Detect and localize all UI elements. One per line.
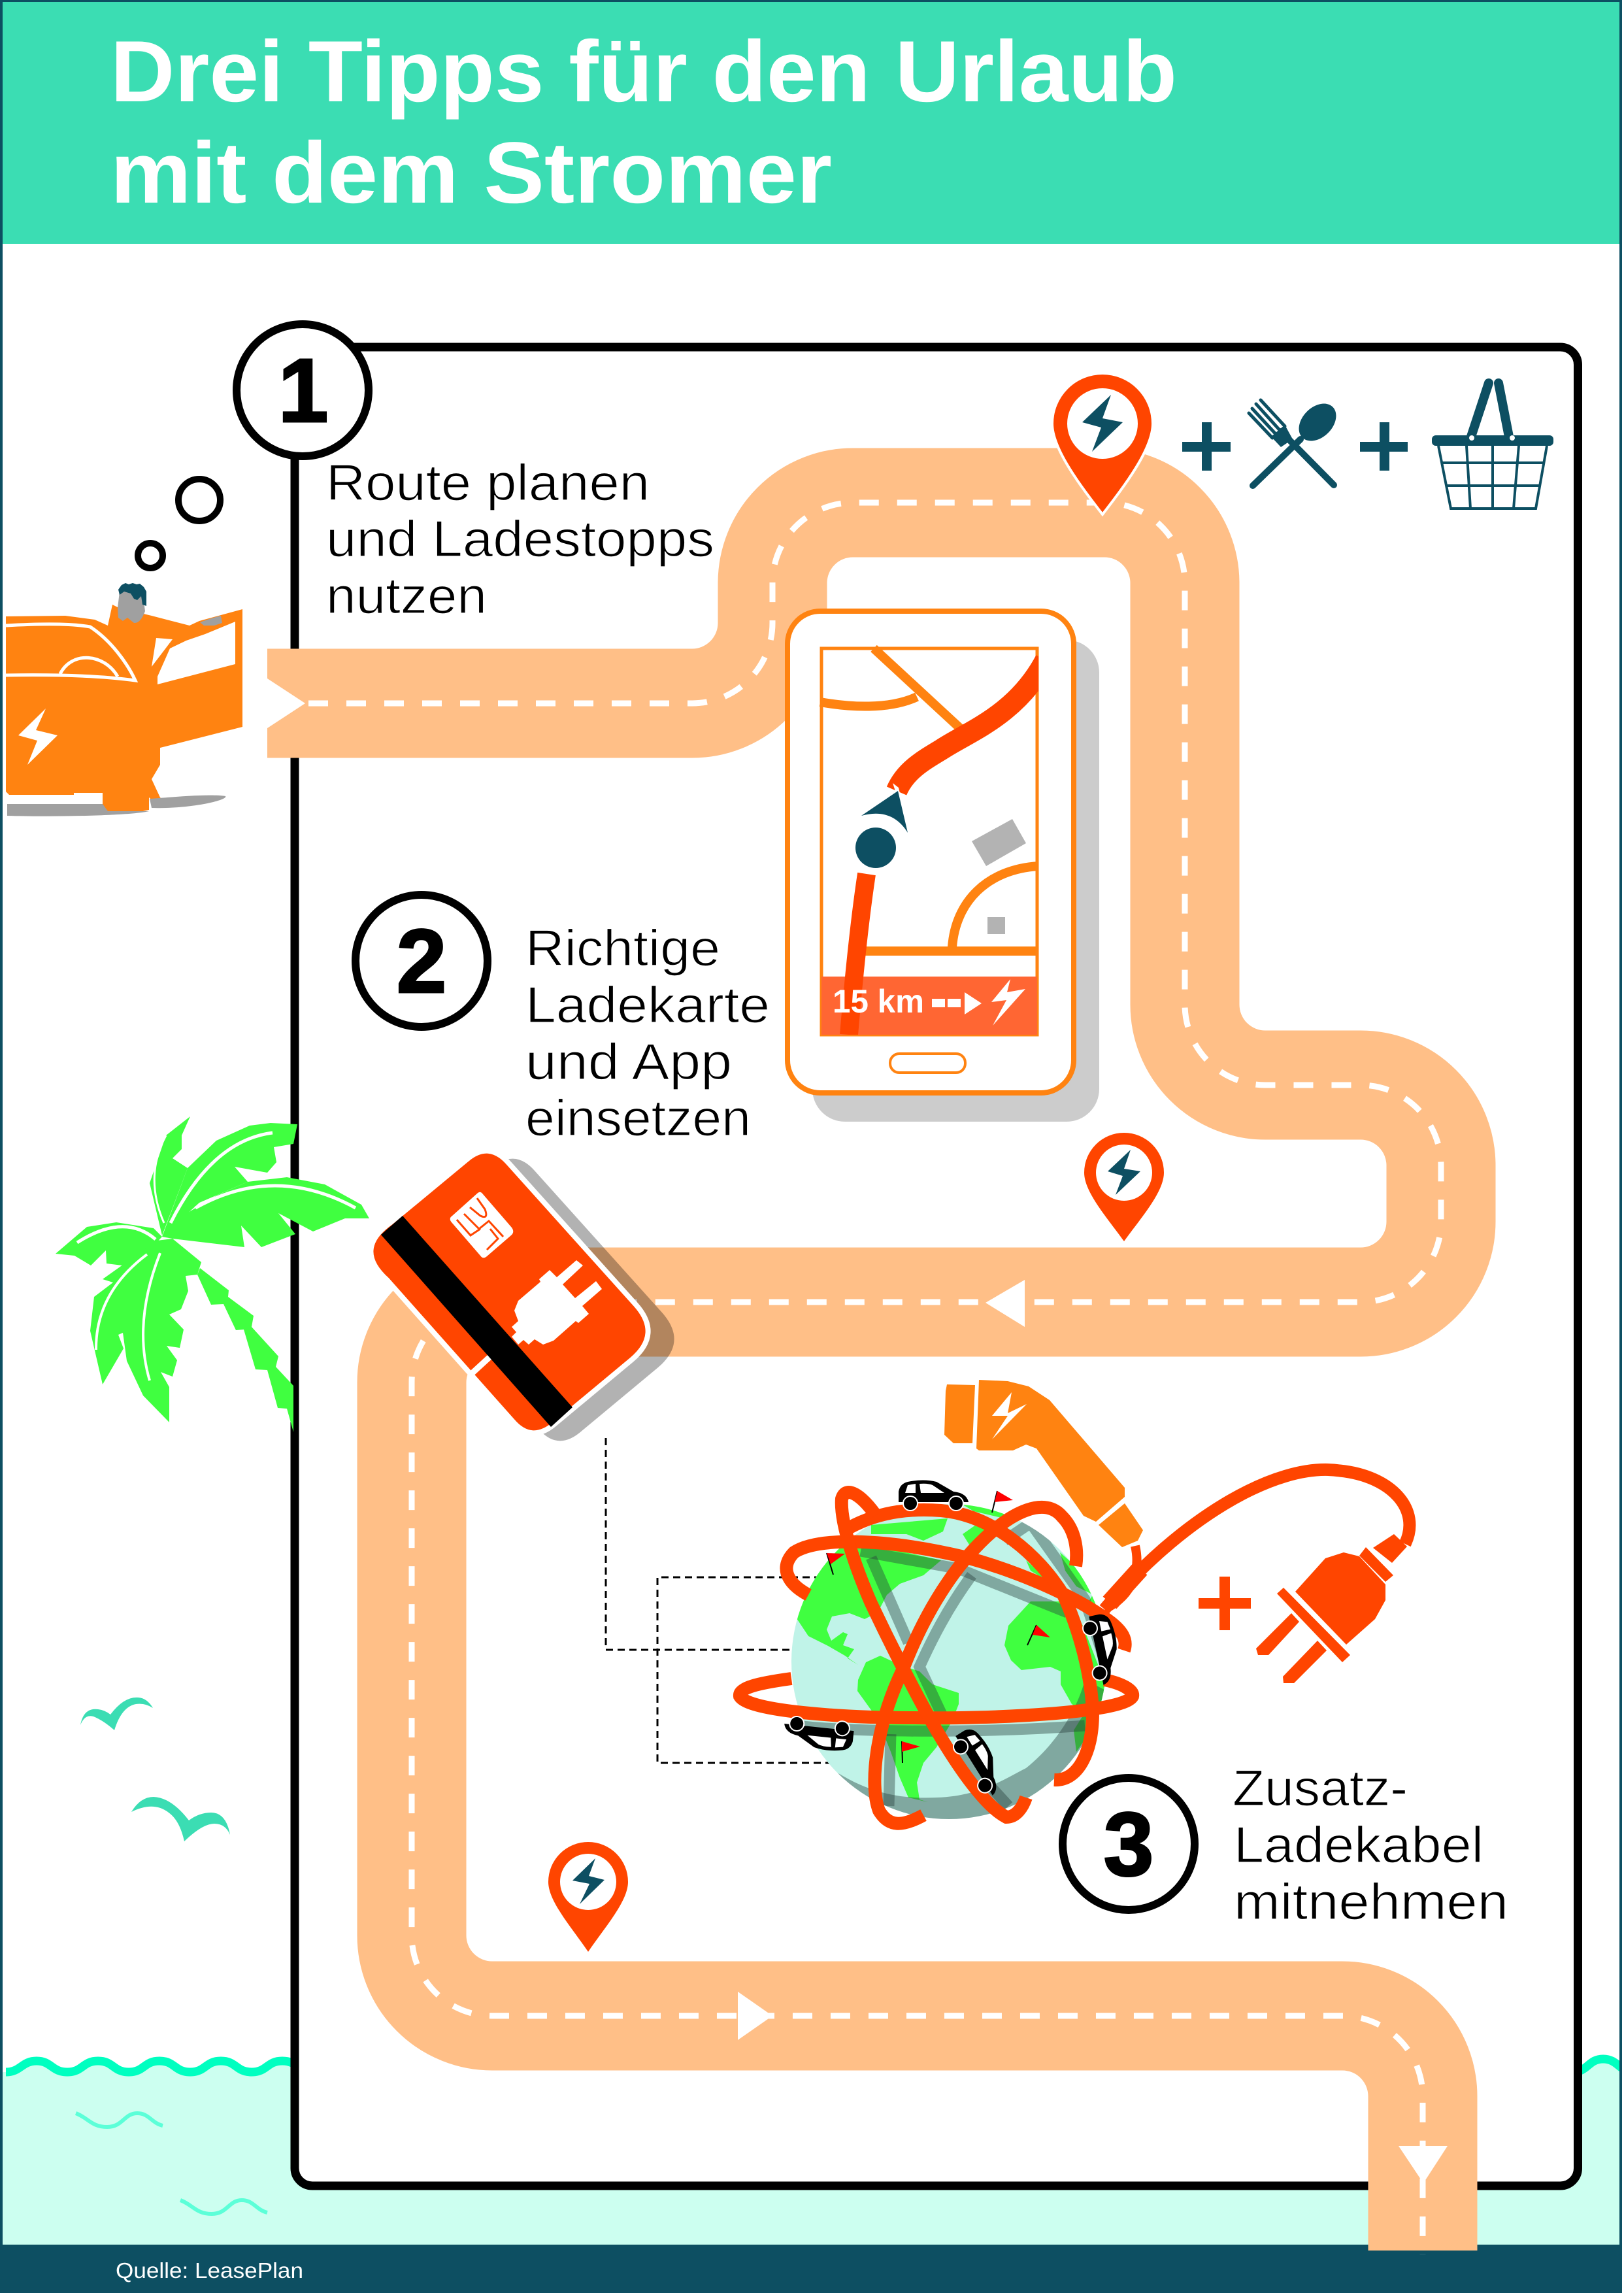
home button	[890, 1054, 965, 1073]
charging handle	[944, 1380, 1143, 1547]
step 3 text	[1233, 1759, 1508, 1930]
thought bubbles	[138, 479, 220, 568]
step 2 number	[356, 895, 488, 1027]
driver head and hand	[118, 588, 222, 626]
globe illustration	[740, 1480, 1133, 1830]
palm fronds	[56, 1116, 369, 1432]
step 2 number: 2	[397, 911, 446, 1012]
route panel frame	[295, 347, 1578, 2186]
footer band	[0, 2245, 1621, 2293]
door window	[152, 622, 235, 684]
step 3 number: 3	[1104, 1794, 1153, 1895]
step 1 text	[326, 454, 714, 624]
phone shadow	[812, 640, 1099, 1122]
dashed connector lines	[606, 1438, 1023, 1763]
card body	[371, 1151, 648, 1433]
route line	[849, 660, 1046, 1035]
step 1 number	[237, 324, 369, 456]
header band	[3, 2, 1621, 244]
position marker	[851, 783, 910, 873]
palm midribs	[77, 1133, 356, 1381]
globe sphere	[791, 1504, 1106, 1819]
charging pin bottom	[548, 1842, 628, 1952]
step 1 text: und Ladestopps	[326, 510, 714, 567]
driver hair	[118, 583, 146, 606]
plus sign	[1182, 422, 1231, 471]
charge card	[371, 1151, 674, 1441]
phone body	[787, 611, 1074, 1093]
charging pin top	[1052, 373, 1153, 514]
car and driver	[6, 583, 242, 816]
distance label	[833, 979, 1025, 1026]
step 3 number	[1063, 1778, 1195, 1910]
card shadow	[400, 1159, 674, 1441]
distance label: 15 km	[833, 983, 924, 1020]
step 2 text: einsetzen	[525, 1089, 751, 1146]
seagulls	[80, 1698, 230, 1841]
orange orbit rings	[740, 1492, 1133, 1824]
notch line	[471, 1352, 495, 1375]
title	[110, 24, 1177, 222]
water background	[3, 2059, 1624, 2245]
car window lines	[6, 624, 135, 680]
icon: shopping basket	[1432, 383, 1553, 509]
cars on globe	[782, 1480, 1125, 1800]
step 1 text: nutzen	[326, 567, 487, 624]
grey map blocks	[972, 819, 1026, 934]
step 2 text: und App	[525, 1033, 732, 1090]
charging cable	[1104, 1469, 1410, 1609]
plus sign orange	[1199, 1577, 1251, 1630]
title: Drei Tipps für den Urlaub	[110, 24, 1177, 120]
plug icon on card	[512, 1260, 602, 1345]
plus sign	[1360, 422, 1408, 471]
step 3 text: Zusatz-	[1233, 1759, 1408, 1816]
icon: power plug	[1256, 1534, 1407, 1683]
smartphone with map	[787, 611, 1099, 1122]
map roads	[820, 648, 1038, 951]
icon: fork and spoon	[1249, 396, 1344, 486]
lightning bolt	[18, 709, 58, 765]
road	[267, 503, 1441, 2251]
step 2 text	[525, 919, 770, 1146]
charging pin middle	[1084, 1133, 1164, 1241]
step 3 text: mitnehmen	[1234, 1873, 1508, 1930]
source note: Quelle: LeasePlan	[116, 2258, 303, 2283]
driver and car body	[6, 605, 242, 812]
step 1 number: 1	[278, 341, 328, 441]
step 2 text: Ladekarte	[525, 976, 770, 1033]
road centre dashes	[308, 503, 1441, 2254]
map screen	[821, 648, 1037, 1035]
magnetic stripe	[381, 1216, 572, 1427]
chip	[450, 1192, 513, 1258]
step 3 text: Ladekabel	[1234, 1816, 1483, 1873]
title: mit dem Stromer	[110, 125, 832, 222]
flags on globe	[827, 1491, 1050, 1763]
continents	[794, 1503, 1111, 1802]
step 2 text: Richtige	[525, 919, 720, 977]
road direction arrows	[267, 678, 1448, 2183]
status bar	[821, 977, 1037, 1035]
step 1 text: Route planen	[326, 454, 650, 511]
ground shadows	[7, 795, 225, 816]
palm tree	[56, 1116, 369, 1432]
ring shadows on globe	[804, 1522, 1104, 1819]
